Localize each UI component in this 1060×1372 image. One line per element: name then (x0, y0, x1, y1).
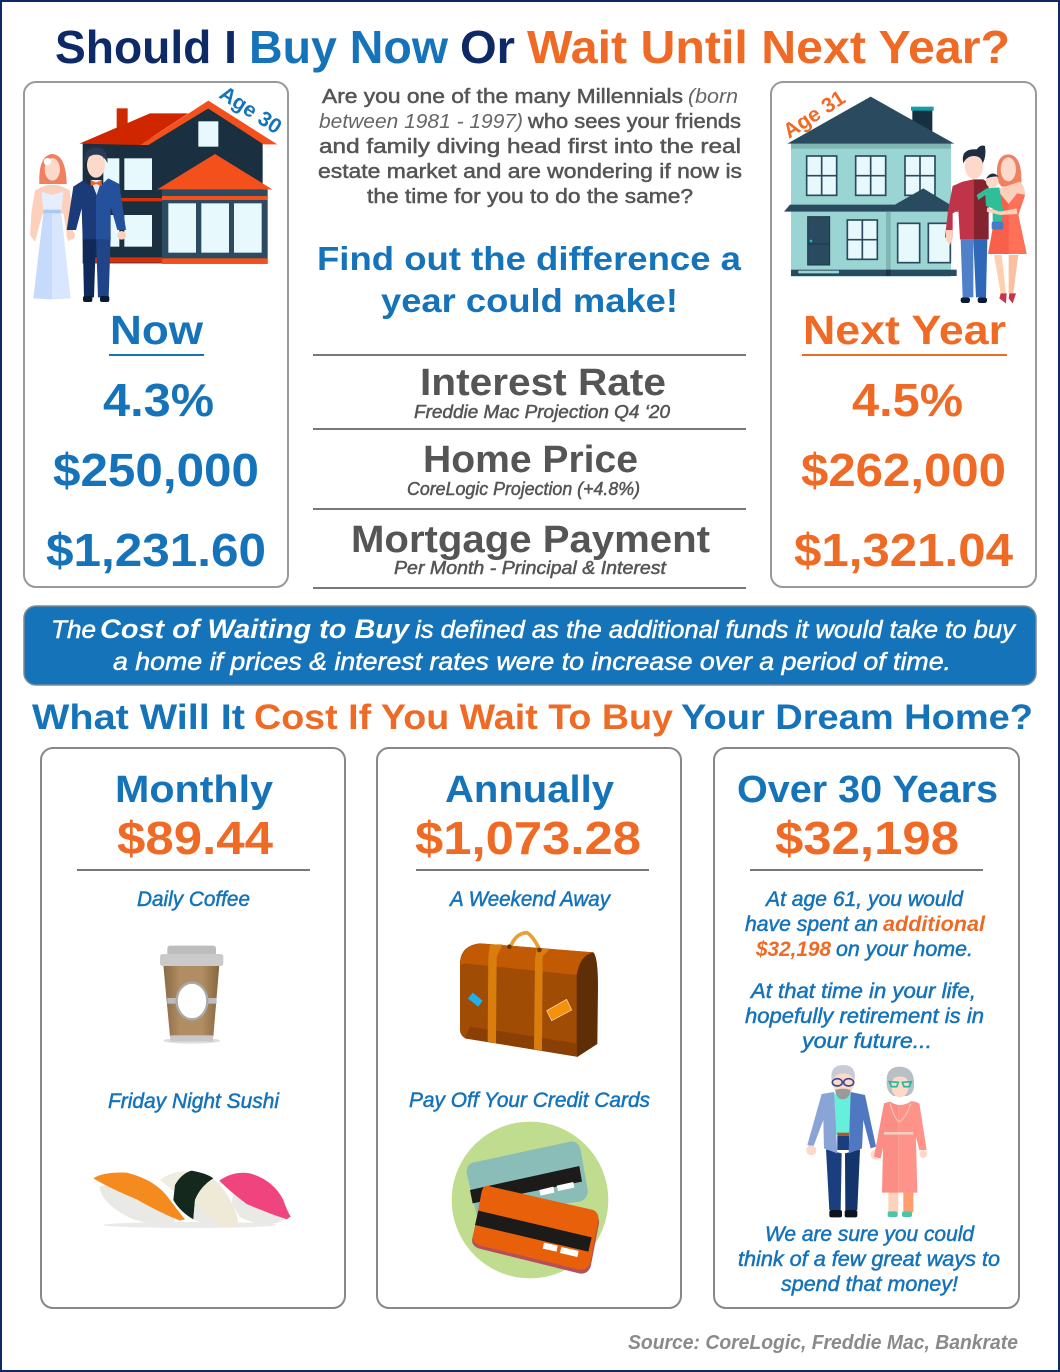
panel: over 30 years (714, 748, 1019, 1308)
intro text: and family diving head first into the real (319, 136, 741, 158)
icon: credit cards (452, 1122, 608, 1278)
icon: suitcase (460, 933, 598, 1057)
row: home price: CoreLogic Projection (+4.8%) (407, 479, 640, 499)
illustration: newlyweds and house (30, 101, 277, 302)
row: home price (407, 439, 640, 499)
value: 30 year cost: $32,198 (775, 812, 959, 864)
banner: cost of waiting definition: The (51, 616, 96, 644)
panel: next year (771, 82, 1036, 587)
row: mortgage payment: Mortgage Payment (351, 519, 710, 561)
row: interest rate (414, 362, 670, 422)
heading: what will it cost: Your Dream Home? (681, 698, 1033, 737)
row: mortgage payment: Per Month - Principal & Interest (394, 558, 667, 578)
banner: cost of waiting definition: a home if prices & interest rates were to increase over a period of time. (113, 648, 951, 676)
heading: next year: Next Year (803, 307, 1006, 353)
title (55, 21, 1010, 73)
row: interest rate: Interest Rate (420, 362, 666, 404)
title: Buy Now (249, 21, 448, 73)
text: retirement: hopefully retirement is in (745, 1005, 984, 1028)
panel: monthly (41, 748, 345, 1308)
heading: now: Now (110, 307, 203, 353)
label: friday night sushi: Friday Night Sushi (108, 1090, 280, 1113)
icon: sushi (93, 1171, 291, 1228)
label: a weekend away: A Weekend Away (448, 888, 611, 911)
heading: what will it cost: What Will It (32, 698, 245, 737)
value: next year mortgage payment: $1,321.04 (794, 524, 1013, 576)
heading: monthly: Monthly (115, 769, 273, 811)
text: additional spend: have spent an (745, 913, 878, 936)
icon: coffee cup (160, 946, 223, 1044)
banner: cost of waiting definition (24, 606, 1036, 685)
label: age 31: Age 31 (779, 86, 850, 143)
text: spend that money (738, 1223, 1000, 1296)
text: additional spend: At age 61, you would (764, 888, 964, 911)
text: additional spend: $32,198 (755, 938, 831, 961)
value: next year home price: $262,000 (801, 444, 1006, 496)
intro text: the time for you to do the same? (367, 186, 693, 208)
text: spend that money: spend that money! (781, 1273, 958, 1296)
intro text: between 1981 - 1997) (319, 111, 523, 133)
text: spend that money: think of a few great ways to (738, 1248, 1000, 1271)
value: now mortgage payment: $1,231.60 (46, 524, 266, 576)
heading: what will it cost: Cost If You Wait To Buy (254, 698, 674, 737)
heading: annually: Annually (445, 769, 614, 811)
value: annual cost: $1,073.28 (415, 812, 641, 864)
intro text: (born (688, 86, 738, 108)
subheading: find out the difference: year could make! (381, 282, 678, 319)
subheading: find out the difference (317, 240, 742, 319)
illustration: older couple (806, 1065, 927, 1217)
title: Should I (55, 21, 237, 73)
intro text: Are you one of the many Millennials (322, 86, 683, 108)
label: daily coffee: Daily Coffee (137, 888, 250, 911)
text: additional spend: additional (883, 913, 986, 936)
value: now interest rate: 4.3% (103, 374, 214, 426)
source note: Source: CoreLogic, Freddie Mac, Bankrate (628, 1332, 1018, 1354)
text: retirement: At that time in your life, (749, 980, 976, 1003)
text: additional spend (745, 888, 986, 961)
panel: annually (377, 748, 681, 1308)
heading: over 30 years: Over 30 Years (737, 769, 998, 811)
value: monthly cost: $89.44 (117, 812, 273, 864)
illustration: family and house (784, 97, 1027, 303)
label: pay off your credit cards: Pay Off Your Credit Cards (409, 1089, 650, 1112)
value: now home price: $250,000 (53, 444, 259, 496)
intro text: estate market and are wondering if now is (318, 161, 742, 183)
label: age 30: Age 30 (215, 82, 286, 139)
text: retirement: your future... (800, 1030, 932, 1053)
comparison table labels (313, 354, 746, 589)
intro text (318, 86, 742, 208)
heading: what will it cost (32, 698, 1033, 737)
row: interest rate: Freddie Mac Projection Q4 ‘20 (414, 402, 670, 422)
banner: cost of waiting definition: Cost of Waiting to Buy (100, 614, 410, 644)
text: spend that money: We are sure you could (765, 1223, 975, 1246)
intro text: who sees your friends (527, 111, 741, 133)
row: mortgage payment (351, 519, 710, 578)
text: additional spend: on your home. (836, 938, 973, 961)
panel: now (24, 82, 288, 587)
row: home price: Home Price (423, 439, 638, 481)
title: Or (460, 21, 515, 73)
subheading: find out the difference: Find out the difference a (317, 240, 742, 277)
banner: cost of waiting definition: is defined as the additional funds it would take to buy (415, 616, 1017, 644)
text: retirement (745, 980, 984, 1053)
value: next year interest rate: 4.5% (852, 374, 963, 426)
title: Wait Until Next Year? (527, 21, 1010, 73)
